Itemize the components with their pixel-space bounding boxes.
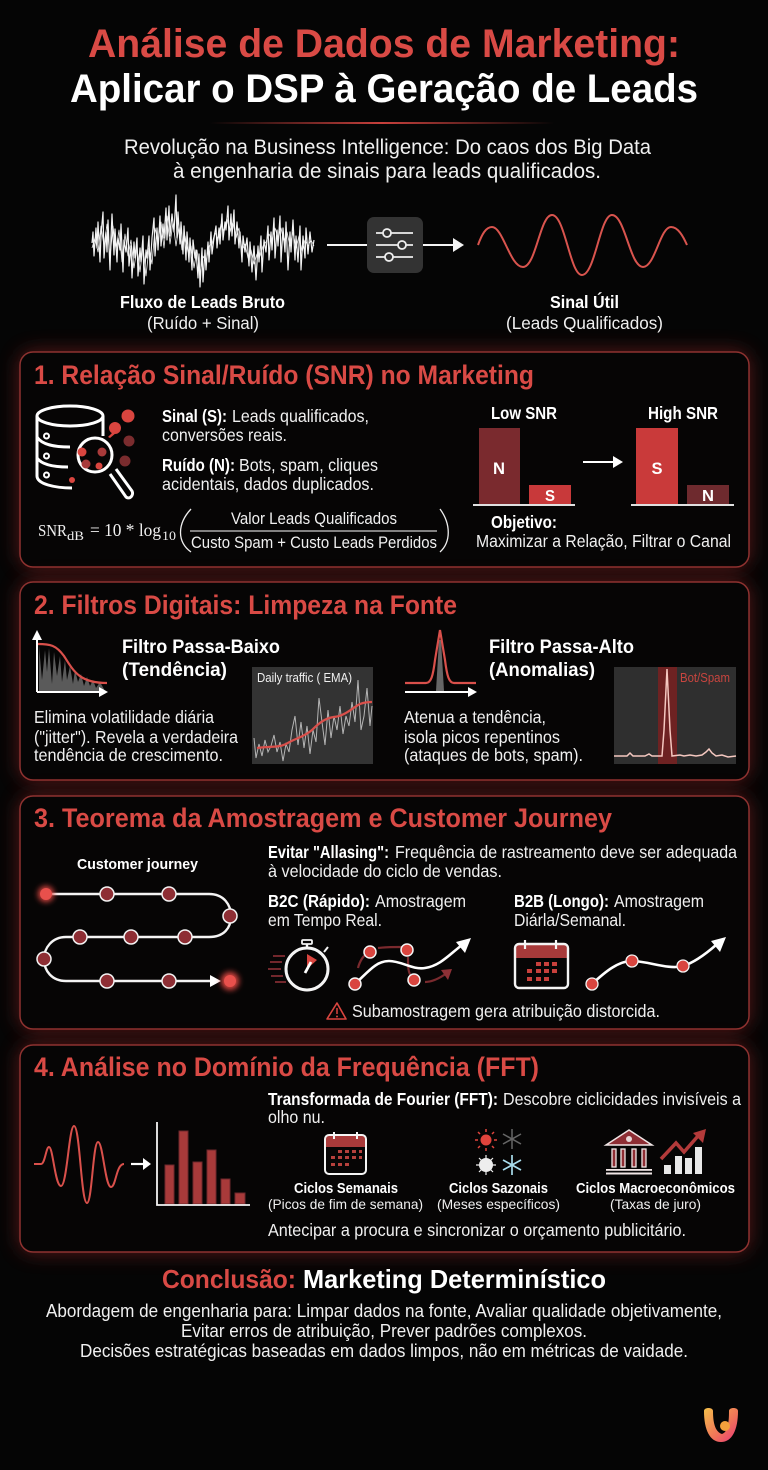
panel 3: sampling theorem — [20, 796, 749, 1029]
high SNR bars: High SNR — [648, 403, 718, 423]
icon: stopwatch — [268, 940, 328, 990]
low-pass description: Elimina volatilidade diária — [34, 707, 214, 727]
SNR formula: 10 — [162, 528, 176, 543]
SNR formula: SNR — [38, 521, 68, 540]
low-pass title: (Tendência) — [122, 659, 227, 681]
icon: high-pass filter — [405, 630, 477, 697]
B2B text: Amostragem — [614, 891, 704, 911]
aliasing text: Frequência de rastreamento deve ser adequada — [395, 842, 737, 862]
signal and noise definitions: conversões reais. — [162, 425, 287, 445]
aliasing text: à velocidade do ciclo de vendas. — [268, 861, 502, 881]
low SNR bars: Low SNR — [491, 403, 557, 423]
signal and noise definitions — [162, 406, 378, 494]
high-pass description: Atenua a tendência, — [404, 707, 546, 727]
conclusion — [46, 1264, 722, 1361]
title: Aplicar o DSP à Geração de Leads — [70, 67, 698, 111]
seasonal cycles — [437, 1129, 560, 1212]
icon: low-pass filter — [32, 630, 108, 697]
SNR formula: Custo Spam + Custo Leads Perdidos — [191, 534, 437, 552]
low SNR bars: S — [545, 488, 555, 505]
conclusion: Decisões estratégicas baseadas em dados limpos, não em métricas de vaidade. — [80, 1341, 688, 1361]
heading 1: 1. Relação Sinal/Ruído (SNR) no Marketing — [34, 360, 534, 390]
high-pass title: (Anomalias) — [489, 659, 595, 681]
seasonal cycles: Ciclos Sazonais — [449, 1181, 548, 1197]
subtitle — [124, 136, 651, 183]
signal and noise definitions: Sinal (S): — [162, 406, 227, 426]
customer journey path: Customer journey — [77, 856, 199, 873]
useful signal label: (Leads Qualificados) — [506, 313, 663, 333]
high-pass title — [489, 636, 634, 681]
heading 4: 4. Análise no Domínio da Frequência (FFT) — [34, 1052, 539, 1082]
weekly cycles: (Picos de fim de semana) — [268, 1196, 423, 1212]
weekly cycles: Ciclos Semanais — [294, 1181, 398, 1197]
title — [70, 22, 698, 111]
arrow to spectrum — [131, 1158, 151, 1170]
high-pass description: (ataques de bots, spam). — [404, 745, 583, 765]
clean sine wave — [478, 215, 687, 275]
B2C text: Amostragem — [375, 891, 466, 911]
aliasing text: Evitar "Allasing": — [268, 842, 389, 862]
conclusion: Marketing Determinístico — [303, 1264, 606, 1294]
low-pass title: Filtro Passa-Baixo — [122, 636, 280, 658]
chart: B2C sampling — [349, 938, 471, 990]
chart: bot/spam spike: Bot/Spam — [680, 670, 730, 685]
logo — [704, 1408, 738, 1442]
high-pass description — [404, 707, 583, 765]
objective: Objetivo: — [491, 512, 557, 532]
icon: database with magnifier — [37, 406, 134, 498]
B2C text: em Tempo Real. — [268, 910, 382, 930]
raw flow label: (Ruído + Sinal) — [147, 313, 259, 333]
signal and noise definitions: Bots, spam, cliques — [239, 455, 378, 475]
panel 2: digital filters — [20, 582, 749, 780]
heading 2: 2. Filtros Digitais: Limpeza na Fonte — [34, 590, 457, 620]
Fourier text: Transformada de Fourier (FFT): — [268, 1089, 498, 1109]
hero diagram: noise to clean signal — [92, 195, 687, 333]
conclusion: Abordagem de engenharia para: Limpar dados na fonte, Avaliar qualidade objetivamente, — [46, 1301, 722, 1321]
arrow with filter — [327, 217, 464, 273]
signal and noise definitions: Ruído (N): — [162, 455, 235, 475]
low-pass description: tendência de crescimento. — [34, 745, 223, 765]
low-pass description — [34, 707, 238, 765]
Fourier text: Descobre ciclicidades invisíveis a — [503, 1089, 741, 1109]
panel 1: SNR — [20, 352, 749, 567]
objective — [476, 512, 731, 551]
high SNR bars: N — [702, 488, 714, 505]
high SNR bars: S — [652, 459, 662, 478]
conclusion: Conclusão: — [162, 1264, 296, 1294]
conclusion: Evitar erros de atribuição, Prever padrões complexos. — [181, 1321, 587, 1341]
useful signal label: Sinal Útil — [550, 291, 619, 312]
signal and noise definitions: Leads qualificados, — [232, 406, 369, 426]
objective: Maximizar a Relação, Filtrar o Canal — [476, 531, 731, 551]
SNR formula — [38, 509, 448, 552]
aliasing text — [268, 842, 737, 881]
wave signal — [34, 1126, 124, 1203]
chart: bot/spam spike — [614, 667, 736, 764]
icon: calendar B2B — [515, 940, 568, 988]
B2B text: Diárla/Semanal. — [514, 910, 626, 930]
takeaway: Antecipar a procura e sincronizar o orçamento publicitário. — [268, 1220, 686, 1240]
seasonal cycles: (Meses específicos) — [437, 1196, 560, 1212]
B2C text — [268, 891, 466, 930]
macroeconomic cycles: Ciclos Macroeconômicos — [576, 1181, 735, 1197]
noisy raw signal waveform — [92, 195, 314, 287]
spectrum bars — [157, 1122, 250, 1205]
chart: daily traffic EMA: Daily traffic ( EMA) — [257, 670, 352, 685]
Fourier text — [268, 1089, 741, 1127]
B2B text — [514, 891, 704, 930]
high-pass title: Filtro Passa-Alto — [489, 636, 634, 658]
subtitle: Revolução na Business Intelligence: Do caos dos Big Data — [124, 136, 651, 159]
raw flow label: Fluxo de Leads Bruto — [120, 292, 285, 312]
title: Análise de Dados de Marketing: — [88, 22, 680, 66]
SNR formula: Valor Leads Qualificados — [231, 510, 397, 528]
panel 4: frequency domain — [20, 1045, 749, 1252]
macroeconomic cycles: (Taxas de juro) — [610, 1196, 701, 1212]
weekly cycles — [268, 1132, 423, 1212]
customer journey path — [37, 856, 239, 990]
heading 3: 3. Teorema da Amostragem e Customer Journey — [34, 803, 612, 833]
low-pass title — [122, 636, 280, 681]
high SNR bars — [631, 403, 734, 505]
Fourier text: olho nu. — [268, 1107, 325, 1127]
high-pass description: isola picos repentinos — [404, 727, 560, 747]
warning: Subamostragem gera atribuição distorcida. — [352, 1001, 660, 1021]
arrow low to high — [583, 456, 623, 468]
chart: daily traffic EMA — [252, 667, 373, 764]
low SNR bars — [473, 403, 575, 505]
B2C text: B2C (Rápido): — [268, 891, 370, 911]
SNR formula: = 10 * log — [90, 520, 161, 540]
SNR formula: dB — [67, 528, 84, 543]
subtitle: à engenharia de sinais para leads qualificados. — [173, 160, 601, 183]
low-pass description: ("jitter"). Revela a verdadeira — [34, 727, 238, 747]
useful signal label — [506, 291, 663, 333]
B2B text: B2B (Longo): — [514, 891, 609, 911]
low SNR bars: N — [493, 459, 505, 478]
macroeconomic cycles — [576, 1129, 735, 1212]
chart: B2B sampling — [586, 937, 726, 990]
raw flow label — [120, 292, 285, 333]
signal and noise definitions: acidentais, dados duplicados. — [162, 474, 374, 494]
